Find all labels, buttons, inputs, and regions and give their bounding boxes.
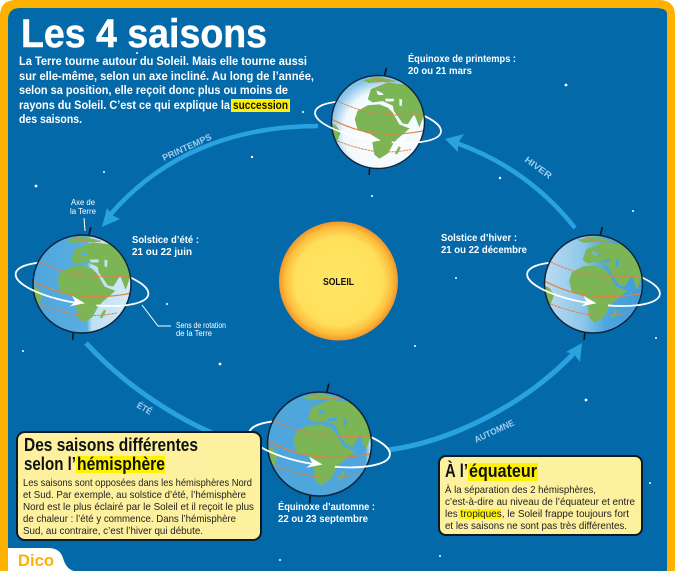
- intro text: La Terre tourne autour du Soleil. Mais elle tourne aussi: [19, 54, 307, 68]
- globe: solstice d'ete: [12, 227, 151, 340]
- label: sens de rotation: Sens de rotation: [176, 321, 226, 330]
- heading: hemisphere: [24, 434, 198, 474]
- text: hemisphere: Nord est le plus éclairé par le Soleil et il reçoit le plus: [23, 501, 254, 513]
- heading: equateur: À l’: [445, 460, 468, 481]
- arrow: ete: [86, 343, 212, 433]
- label: axe de la Terre: la Terre: [70, 207, 97, 216]
- intro text: des saisons.: [19, 112, 82, 126]
- sun: [279, 222, 398, 340]
- season label: printemps: PRINTEMPS: [161, 132, 213, 163]
- label: equinoxe d'automne: [278, 500, 375, 525]
- label: sens de rotation: [142, 305, 226, 338]
- heading: equateur: [445, 460, 538, 481]
- label: solstice d'hiver: [441, 233, 527, 256]
- text: equateur: [445, 483, 635, 532]
- heading: hemisphere: selon l’: [24, 453, 76, 474]
- text: hemisphere: de chaleur : l’été y commence. Dans l’hémisphère: [23, 513, 236, 525]
- label: solstice d'hiver: Solstice d’hiver :: [441, 233, 517, 244]
- text: hemisphere: Les saisons sont opposées dans les hémisphères Nord: [23, 477, 252, 489]
- heading: equateur: équateur: [469, 460, 537, 481]
- season label: ete: ÉTÉ: [135, 400, 154, 417]
- label: equinoxe d'automne: 22 ou 23 septembre: [278, 514, 368, 525]
- panel: hemisphere: [17, 432, 261, 540]
- text: hemisphere: [23, 477, 254, 537]
- label: solstice d'ete: 21 ou 22 juin: [132, 247, 192, 258]
- title: Les 4 saisons: [21, 12, 267, 56]
- label: solstice d'hiver: 21 ou 22 décembre: [441, 245, 527, 256]
- text: hemisphere: et Sud. Par exemple, au solstice d’été, l’hémisphère: [23, 489, 246, 501]
- label: solstice d'ete: [132, 235, 199, 258]
- intro text: rayons du Soleil. C’est ce qui explique la: [19, 98, 230, 112]
- text: equateur: et les saisons ne sont pas très différentes.: [445, 520, 627, 532]
- intro text: selon sa position, elle reçoit donc plus ou moins de: [19, 83, 288, 97]
- label: equinoxe de printemps: Équinoxe de printemps :: [408, 52, 516, 65]
- panel: equateur: [439, 456, 642, 535]
- sun label: SOLEIL: [323, 276, 354, 288]
- label: sens de rotation: de la Terre: [176, 329, 213, 338]
- intro text: [19, 54, 314, 126]
- globe: solstice d'hiver: [523, 227, 663, 340]
- label: solstice d'ete: Solstice d’été :: [132, 235, 199, 246]
- text: hemisphere: Sud, au contraire, c’est l’hiver qui débute.: [23, 525, 203, 537]
- season label: hiver: HIVER: [523, 155, 554, 181]
- label: equinoxe de printemps: 20 ou 21 mars: [408, 66, 472, 77]
- intro text: succession: [233, 98, 288, 112]
- arrow: automne: [388, 343, 582, 450]
- label: equinoxe de printemps: [408, 52, 516, 77]
- text: equateur: À la séparation des 2 hémisphères,: [445, 483, 596, 496]
- intro text: sur elle-même, selon un axe incliné. Au long de l’année,: [19, 69, 314, 83]
- label: axe de la Terre: Axe de: [71, 198, 96, 207]
- label: axe de la Terre: [70, 198, 97, 231]
- heading: hemisphere: Des saisons différentes: [24, 434, 198, 455]
- arrow: hiver: [445, 134, 575, 228]
- label: equinoxe d'automne: Équinoxe d’automne :: [278, 500, 375, 513]
- text: equateur: les tropiques, le Soleil frappe toujours fort: [445, 508, 629, 520]
- season label: automne: AUTOMNE: [473, 418, 516, 445]
- globe: equinoxe de printemps: [312, 68, 444, 175]
- heading: hemisphere: hémisphère: [77, 453, 165, 474]
- dico tab: [8, 548, 74, 571]
- globe: equinoxe d'automne: [245, 384, 393, 503]
- dico tab: Dico: [18, 551, 54, 570]
- text: equateur: c’est-à-dire au niveau de l’équateur et entre: [445, 496, 635, 508]
- arrow: printemps: [102, 126, 318, 227]
